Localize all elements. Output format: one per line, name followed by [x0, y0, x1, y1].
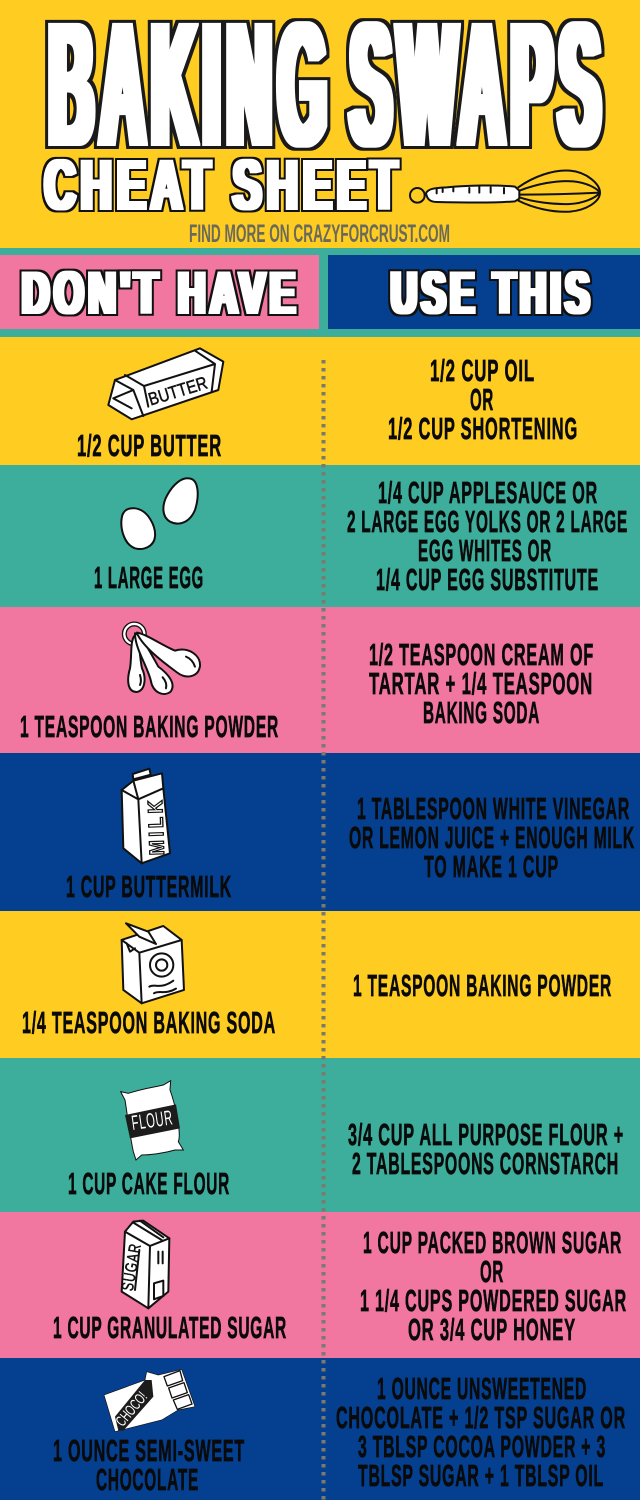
header: don't have: DON'T HAVE — [22, 260, 300, 326]
swap: granulated sugar — [360, 1225, 627, 1347]
swap: butter: OR — [470, 382, 494, 417]
label: 1 ounce semi-sweet chocolate: CHOCOLATE — [96, 1462, 199, 1497]
label: 1 cup granulated sugar: 1 CUP GRANULATED SUGAR — [53, 1310, 287, 1345]
icon: butter — [108, 348, 223, 419]
label: 1 teaspoon baking powder: 1 TEASPOON BAKING POWDER — [20, 709, 279, 744]
row: cake flour — [0, 1058, 640, 1212]
swap: butter — [388, 353, 578, 446]
row: granulated sugar — [0, 1212, 640, 1358]
icon: flour bag: FLOUR — [130, 1106, 175, 1135]
swap: cake flour — [348, 1117, 624, 1181]
swap: butter: 1/2 CUP OIL — [430, 353, 535, 388]
row: butter — [0, 337, 640, 465]
icon: sugar box: SUGAR — [118, 1241, 145, 1292]
label: 1 ounce semi-sweet chocolate: 1 OUNCE SEMI-SWEET — [53, 1433, 245, 1468]
icon: measuring spoons — [124, 624, 200, 694]
icon: chocolate bar — [104, 1369, 195, 1432]
label: 1/2 cup butter: 1/2 CUP BUTTER — [77, 428, 222, 463]
icon: milk carton — [122, 769, 170, 863]
icon: baking soda box — [122, 923, 184, 1003]
swap: buttermilk — [349, 791, 635, 884]
row: cake flour: 1 CUP CAKE FLOUR — [68, 1166, 230, 1201]
row: egg — [0, 465, 640, 607]
header panel background — [0, 0, 640, 248]
icon: eggs — [121, 478, 198, 549]
subtitle: CHEAT SHEET — [44, 146, 402, 226]
row: baking powder — [0, 607, 640, 753]
label: 1 ounce semi-sweet chocolate — [53, 1433, 245, 1497]
icon: flour bag — [121, 1081, 183, 1160]
icon: milk carton: MILK — [144, 797, 169, 856]
header: don't have — [0, 255, 319, 329]
swap: chocolate — [336, 1371, 626, 1493]
label: 1 cup buttermilk: 1 CUP BUTTERMILK — [66, 869, 232, 904]
column header band — [0, 248, 640, 337]
row: chocolate — [0, 1358, 640, 1500]
label: 1/4 teaspoon baking soda: 1/4 TEASPOON BAKING SODA — [22, 1005, 276, 1040]
row: baking soda — [0, 911, 640, 1058]
swap: granulated sugar: OR — [480, 1254, 504, 1289]
icon: butter: BUTTER — [146, 373, 210, 409]
swap: baking powder — [369, 637, 594, 730]
row: egg: 1 LARGE EGG — [94, 560, 204, 595]
icon: whisk — [410, 171, 600, 212]
row: buttermilk — [0, 753, 640, 911]
icon: sugar box — [118, 1221, 169, 1308]
swap: egg — [347, 475, 628, 597]
icon: chocolate bar: CHOCO! — [113, 1389, 151, 1430]
